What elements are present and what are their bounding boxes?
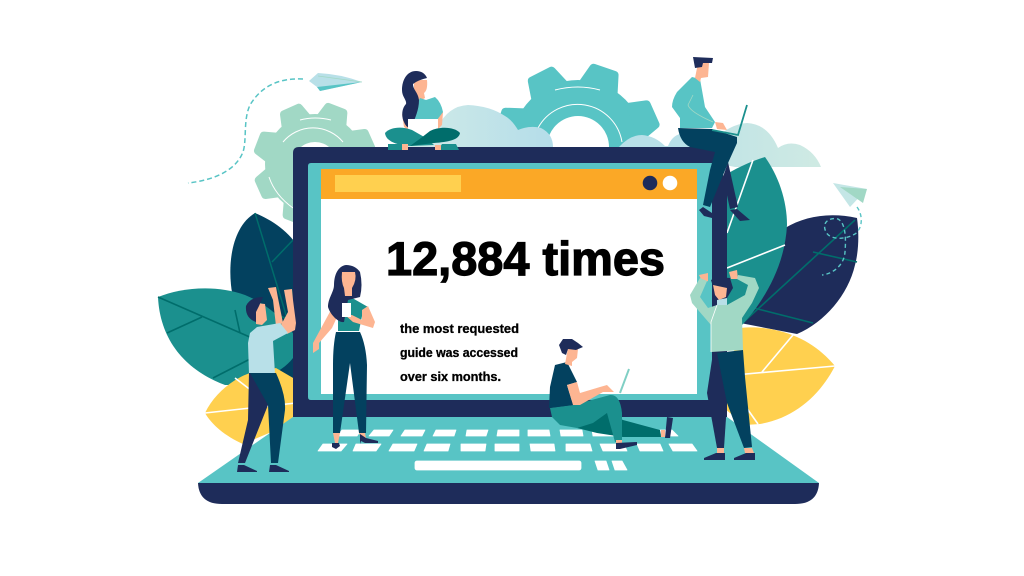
cloud: right: [700, 123, 821, 167]
left leg: [385, 128, 434, 146]
dashed flight path: left: [188, 79, 303, 183]
cloud: behind seated woman: [398, 105, 553, 147]
gear: mint: [251, 100, 379, 228]
screen: [321, 199, 697, 394]
paper plane: right: [833, 183, 867, 207]
laptop: [408, 119, 438, 138]
browser dot: navy: [643, 176, 657, 190]
gear: teal: [492, 61, 663, 214]
laptop base: [198, 483, 819, 504]
feet: [717, 448, 754, 453]
fists: [699, 270, 738, 283]
browser bar: [321, 169, 697, 199]
shirt: [408, 97, 443, 120]
right leg: [410, 128, 460, 146]
address field: [335, 175, 461, 192]
hand: [715, 122, 727, 130]
keyboard deck: [198, 417, 819, 483]
leaf: yellow left: [205, 368, 300, 444]
cloud: small centre puffs: [619, 134, 700, 147]
person: woman with phone: [313, 265, 378, 449]
feet: [333, 433, 366, 443]
trousers: [333, 332, 367, 433]
laptop: [198, 147, 819, 504]
arm two: [281, 289, 296, 334]
browser dot: white: [663, 176, 677, 190]
laptop: [620, 369, 629, 393]
feet: [616, 430, 665, 444]
left arm: [313, 308, 338, 353]
laptop: [712, 105, 747, 135]
front leg: [678, 128, 737, 207]
collar: [717, 298, 727, 306]
person: man sitting on laptop top right: [672, 57, 750, 221]
head: [695, 63, 709, 82]
shirt: [248, 323, 288, 374]
leaf: teal left: [158, 288, 300, 385]
screen inner frame: [308, 163, 712, 400]
face: [414, 80, 427, 102]
body text: [400, 322, 519, 384]
hair: [402, 71, 427, 128]
front leg: [550, 395, 622, 442]
right arm: [345, 306, 375, 328]
teal leg: [717, 350, 752, 448]
keyboard keys: [318, 430, 697, 470]
teal leg: [250, 373, 285, 463]
shoes: [699, 207, 750, 221]
arms: [402, 112, 443, 131]
shirt: [332, 295, 368, 331]
body text: guide was accessed: [400, 346, 518, 360]
shoes: [388, 144, 459, 150]
arm one: [268, 287, 283, 326]
hair: [328, 265, 362, 322]
back leg: [723, 162, 738, 209]
face: [713, 285, 727, 300]
head: [256, 303, 267, 325]
back leg: [577, 413, 661, 437]
shoes: [237, 465, 289, 472]
person: man cheering left: [237, 287, 296, 472]
shoes: [616, 417, 673, 449]
head: [565, 348, 578, 366]
paper plane: left: [309, 73, 362, 91]
face: [342, 272, 356, 296]
screen bezel: [293, 147, 727, 417]
sweater: [690, 275, 759, 352]
body text: over six months.: [400, 370, 501, 384]
headline: 12,884 times: [386, 232, 665, 285]
arm: [567, 382, 614, 405]
person: man sitting on keyboard: [549, 339, 673, 449]
dashed flight path: right: [822, 207, 861, 275]
navy leg: [238, 373, 268, 463]
person: man standing right with raised arms: [690, 270, 759, 460]
shoes: [704, 453, 755, 460]
phone: [342, 303, 351, 317]
navy leg: [707, 352, 730, 448]
shirt: [549, 362, 577, 408]
leaf: navy right: [735, 215, 858, 334]
hair: [711, 277, 733, 298]
torso: [672, 77, 715, 128]
leaf: yellow right: [720, 327, 835, 425]
leaf: teal right: [716, 157, 787, 330]
person: woman sitting on top: [385, 71, 460, 150]
leaf: dark blue left: [230, 213, 300, 385]
body text: the most requested: [400, 322, 519, 336]
